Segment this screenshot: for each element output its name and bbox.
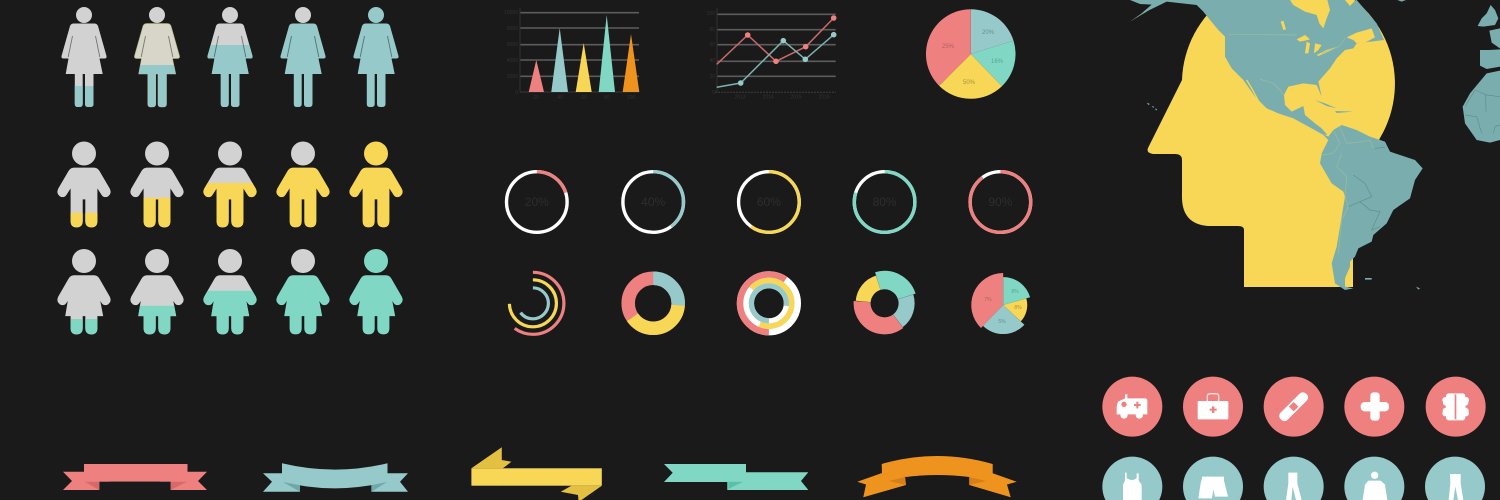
icon: ambulance bbox=[1102, 377, 1162, 437]
ring: 20% bbox=[506, 172, 567, 232]
figure: man 20% bbox=[58, 142, 110, 227]
panel: women figures bbox=[61, 7, 399, 107]
chart: line chart bbox=[707, 8, 836, 100]
ring: 40%: 40% bbox=[641, 195, 666, 209]
ring: 80% bbox=[854, 172, 915, 232]
figure: girl 80% bbox=[277, 249, 329, 334]
icon: tank top bbox=[1102, 457, 1162, 500]
ring: 40% bbox=[623, 172, 684, 232]
world map bbox=[1130, 0, 1500, 290]
chart: exploded donut bbox=[853, 272, 916, 335]
chart: line chart: 60 bbox=[709, 42, 715, 48]
chart: line chart: 2013 bbox=[734, 94, 746, 100]
figure: man 40% bbox=[131, 142, 183, 227]
chart: triangle bar chart: 60 bbox=[581, 95, 587, 101]
icon: shorts bbox=[1183, 457, 1243, 500]
figure: girl 20% bbox=[58, 249, 110, 334]
chart: line chart: 100 bbox=[707, 11, 715, 17]
chart: triangle bar chart: 8000 bbox=[507, 26, 518, 32]
ribbon: mint step bbox=[664, 464, 808, 490]
chart: line chart: 40 bbox=[709, 58, 715, 64]
map: north america bbox=[1130, 0, 1384, 135]
panel: progress rings bbox=[506, 172, 1031, 232]
figure: man 100% bbox=[350, 142, 402, 227]
chart: line chart: 80 bbox=[709, 27, 715, 33]
chart: pie chart: 20% bbox=[982, 30, 995, 36]
figure: woman 80% bbox=[280, 7, 326, 107]
ribbon: blue curved bbox=[263, 463, 408, 492]
figure: girl 60% bbox=[204, 249, 256, 334]
chart: pie chart bbox=[926, 9, 1016, 99]
panel: clothing icons bbox=[1102, 457, 1485, 500]
map: south america bbox=[1320, 125, 1423, 290]
chart: variable radius pie: 5% bbox=[998, 319, 1006, 325]
ribbon: pink flat bbox=[63, 464, 207, 492]
icon: medical cross bbox=[1344, 377, 1404, 437]
icon: star of life bbox=[1426, 377, 1486, 437]
chart: variable radius pie: 8% bbox=[1014, 305, 1022, 311]
chart: triangle bar chart: 0 bbox=[515, 90, 518, 96]
ring: 60% bbox=[739, 172, 799, 232]
ring: 20%: 20% bbox=[525, 195, 549, 209]
chart: line chart: 2016 bbox=[818, 94, 830, 100]
figure: woman 60% bbox=[207, 7, 253, 107]
ring: 90% bbox=[970, 172, 1031, 232]
chart: triangle bar chart: 20 bbox=[533, 95, 539, 101]
chart: triangle bar chart: 10000 bbox=[504, 10, 518, 16]
ring: 90%: 90% bbox=[988, 195, 1013, 209]
icon: bandage bbox=[1264, 377, 1324, 437]
chart: triangle bar chart: 100 bbox=[627, 95, 635, 101]
icon: first aid kit bbox=[1183, 377, 1243, 437]
figure: man 80% bbox=[277, 142, 329, 227]
chart: variable radius pie bbox=[971, 273, 1030, 334]
chart: triangle bar chart: 6000 bbox=[507, 42, 518, 48]
chart: variable radius pie: 7% bbox=[984, 297, 992, 303]
chart: line chart: 20 bbox=[709, 74, 715, 80]
ring: 80%: 80% bbox=[873, 195, 897, 209]
chart: triangle bar chart: 40 bbox=[557, 95, 563, 101]
figure: girl 100% bbox=[350, 249, 402, 334]
map: africa bbox=[1463, 71, 1500, 143]
panel: ribbons bbox=[63, 447, 1017, 500]
chart: line chart: 2014 bbox=[762, 94, 774, 100]
map: europe bbox=[1478, 5, 1500, 69]
panel: girls figures bbox=[58, 249, 402, 334]
figure: woman 20% bbox=[61, 7, 107, 107]
head silhouette bbox=[1148, 0, 1395, 287]
chart: pie chart: 16% bbox=[991, 59, 1004, 65]
chart: line chart: 0 bbox=[712, 90, 715, 96]
chart: triangle bar chart: 80 bbox=[604, 95, 610, 101]
chart: concentric arcs bbox=[502, 272, 564, 334]
icon: jacket with hood bbox=[1344, 457, 1404, 500]
figure: man 60% bbox=[204, 142, 256, 227]
ribbon: orange arched bbox=[857, 456, 1017, 497]
chart: donut bbox=[628, 278, 678, 328]
chart: pie chart: 25% bbox=[942, 44, 955, 50]
chart: variable radius pie: 8% bbox=[1011, 289, 1019, 295]
panel: men figures bbox=[58, 142, 402, 227]
map: islands bbox=[1147, 0, 1406, 111]
panel: medical icons bbox=[1102, 377, 1486, 437]
figure: girl 40% bbox=[131, 249, 183, 334]
chart: triangle bar chart bbox=[504, 8, 639, 101]
ribbon: yellow arrow bbox=[471, 447, 602, 500]
ring: 60%: 60% bbox=[757, 195, 781, 209]
figure: woman 40% bbox=[134, 7, 180, 107]
icon: slim trousers bbox=[1425, 457, 1485, 500]
chart: multi-ring donut bbox=[737, 271, 801, 335]
chart: line chart: 2015 bbox=[790, 94, 802, 100]
figure: woman 100% bbox=[353, 7, 399, 107]
chart: triangle bar chart: 4000 bbox=[507, 58, 518, 64]
chart: triangle bar chart: 2000 bbox=[507, 74, 518, 80]
chart: pie chart: 50% bbox=[963, 80, 976, 86]
icon: trousers bbox=[1264, 457, 1324, 500]
